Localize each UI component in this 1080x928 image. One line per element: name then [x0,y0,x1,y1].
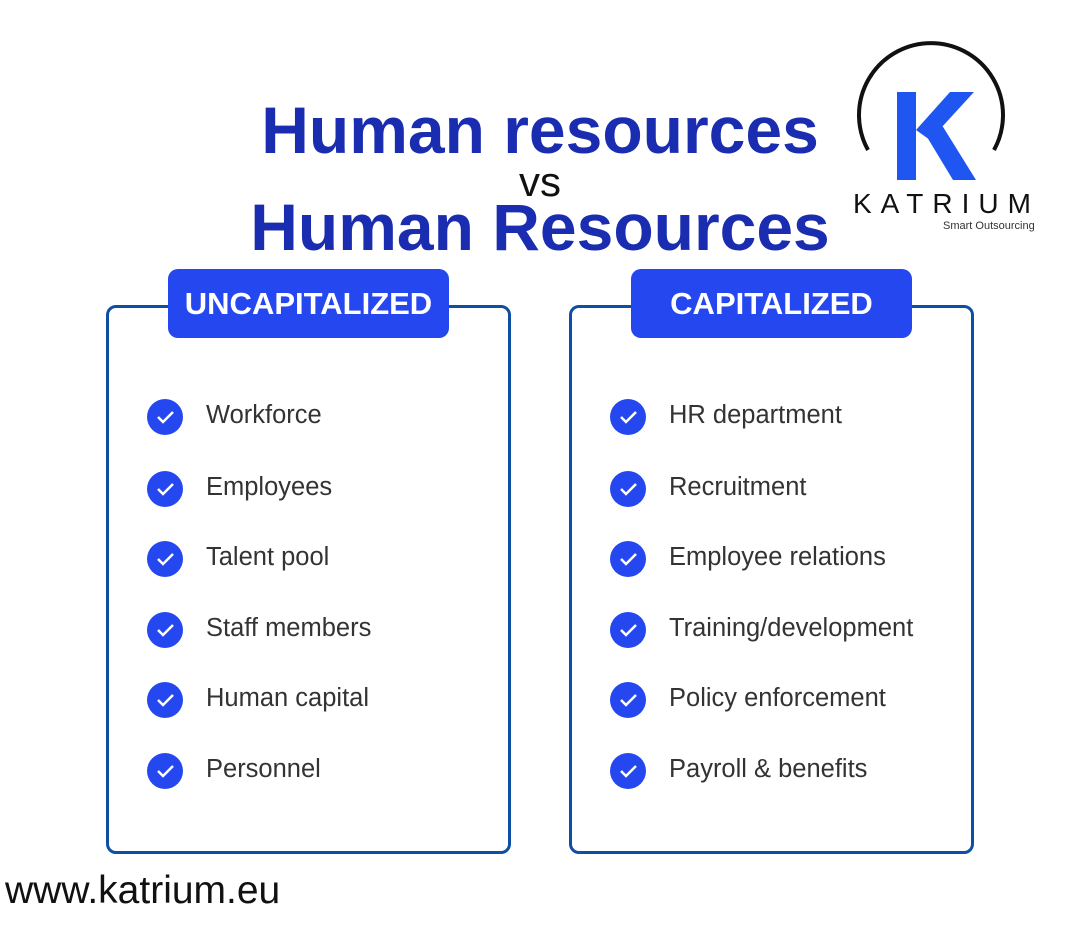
panel: capitalized: Payroll & benefits [669,755,867,783]
panel: uncapitalized: Human capital [206,684,369,712]
label: capitalized [631,269,912,338]
title line 1: Human resources [261,93,819,167]
label: capitalized: CAPITALIZED [670,286,873,321]
panel: capitalized: Employee relations [669,543,886,571]
panel: uncapitalized: Workforce [206,401,322,429]
panel: capitalized: Training/development [669,614,913,642]
vs: vs [519,158,561,205]
panel: capitalized: HR department [669,401,842,429]
panel: uncapitalized: Personnel [206,755,321,783]
footer url: www.katrium.eu [5,869,280,912]
panel: capitalized [569,305,974,854]
panel: uncapitalized [106,305,511,854]
logo: KATRIUM [853,188,1040,219]
panel: capitalized: Recruitment [669,473,806,501]
label: uncapitalized [168,269,449,338]
panel: uncapitalized: Employees [206,473,332,501]
panel: uncapitalized: Staff members [206,614,371,642]
panel: uncapitalized: Talent pool [206,543,329,571]
list items [610,399,914,789]
title line 2: Human Resources [250,190,830,264]
list items [147,399,371,789]
logo: Smart Outsourcing [943,220,1035,232]
panel: capitalized: Policy enforcement [669,684,886,712]
label: uncapitalized: UNCAPITALIZED [185,286,432,321]
logo [853,41,1040,232]
